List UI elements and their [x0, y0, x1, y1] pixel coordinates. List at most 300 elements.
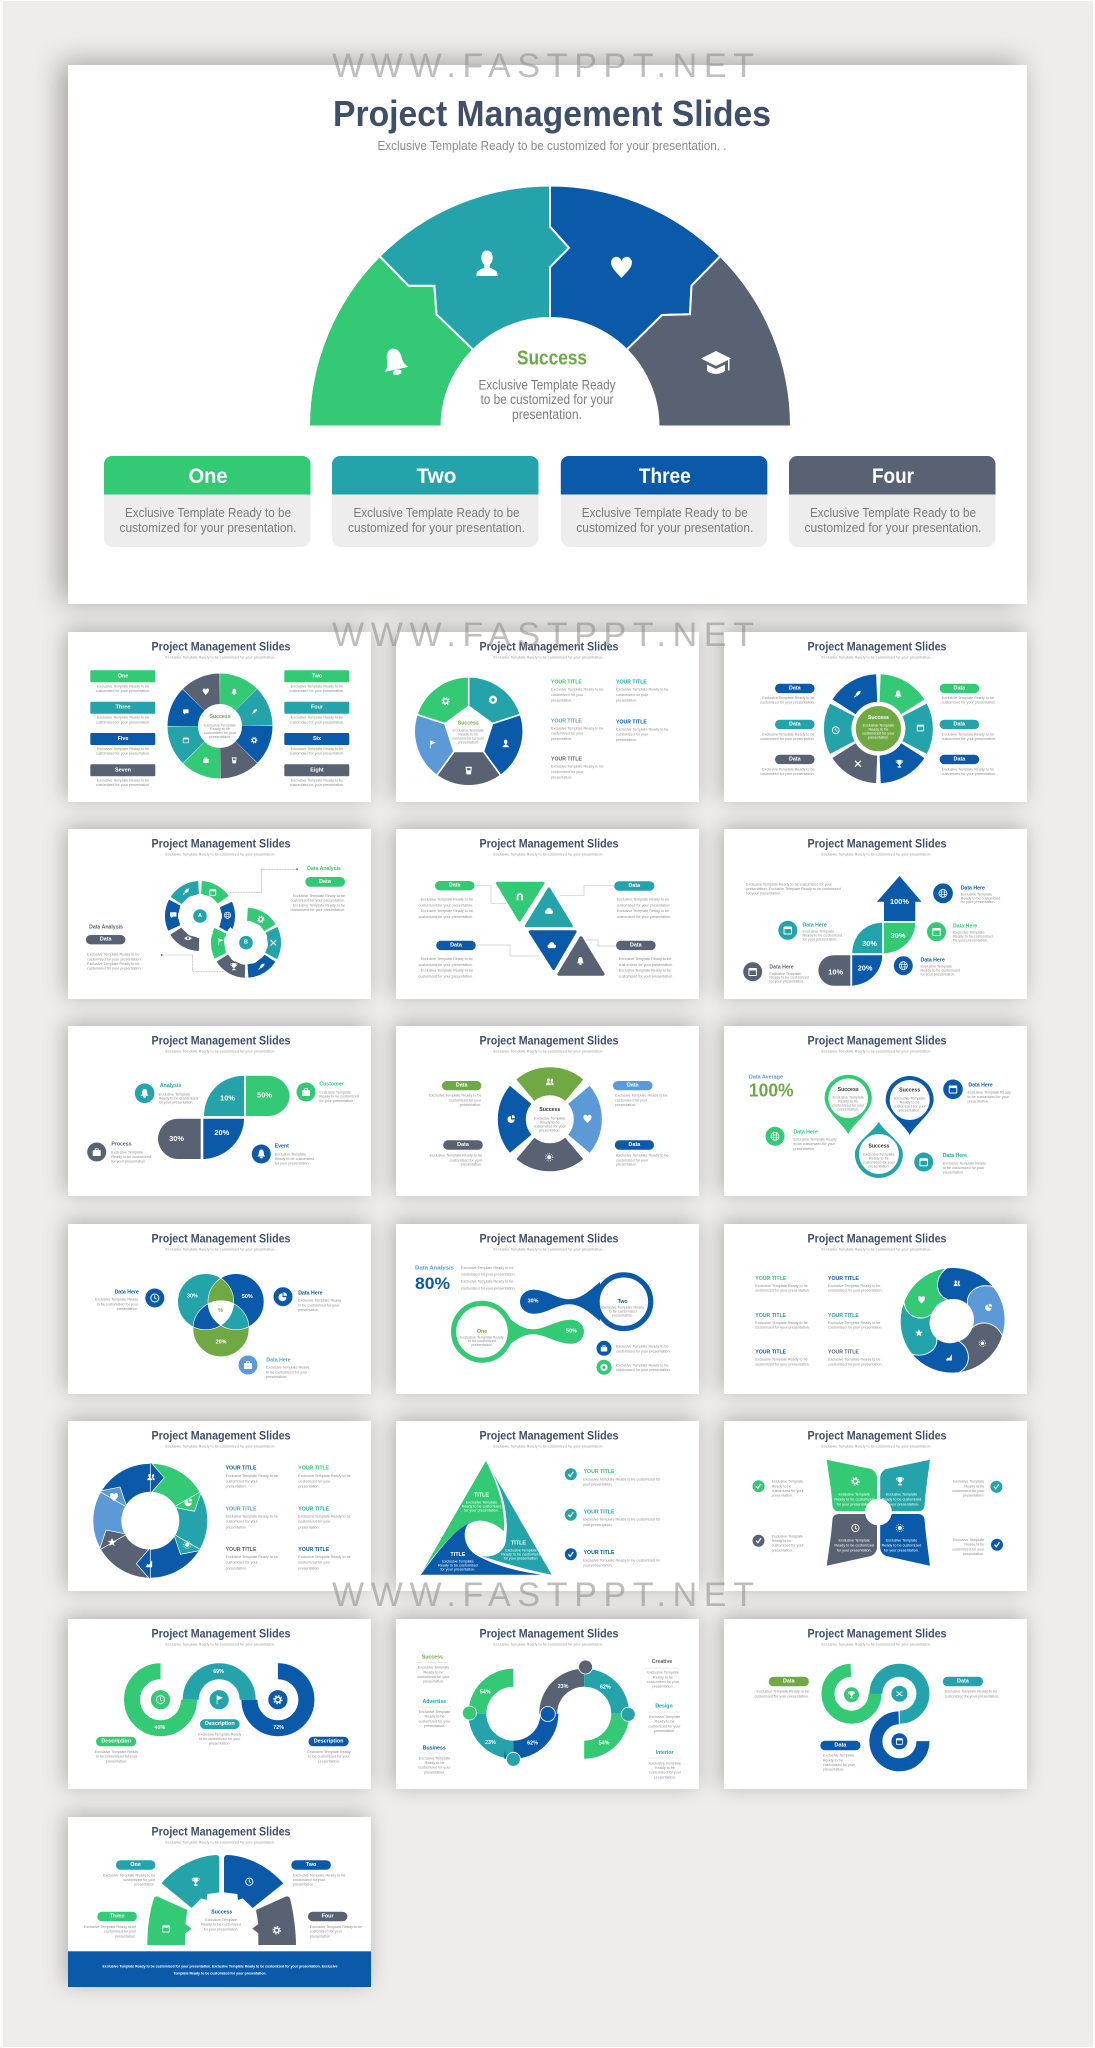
- label: left: Description: [101, 1738, 131, 1744]
- label: three: [84, 1912, 137, 1938]
- chart: wave: [477, 1678, 620, 1750]
- label: three: Exclusive Template Ready to be: [84, 1925, 136, 1929]
- label: teal: Data: [628, 883, 641, 889]
- text block: for your presentation.: [746, 892, 781, 896]
- subheading: Exclusive Template Ready to be customized for your presentation.: [166, 853, 276, 857]
- percent labels: 54%: [599, 1741, 610, 1747]
- label: dark: customized for your presentation.: [619, 975, 673, 979]
- gear ring B: [218, 914, 274, 971]
- gear hubs: A: [198, 913, 202, 919]
- callout: dark: Data Here: [769, 965, 794, 971]
- label boxes left: customized for your presentation.: [96, 720, 150, 724]
- callout: blue: presentation.: [968, 1100, 989, 1104]
- chart: donut: [183, 689, 257, 763]
- label: dark: Data: [457, 1142, 470, 1148]
- segment: dark: [252, 1896, 296, 1945]
- center circle: customized for your: [862, 732, 895, 736]
- labels right: [940, 684, 996, 776]
- label: teal: Exclusive Template Ready to be: [617, 897, 669, 901]
- check item: YOUR TITLE: [584, 1510, 615, 1516]
- icon: bell: [380, 346, 409, 377]
- text block: [828, 1350, 883, 1366]
- callout: dark: for your presentation.: [769, 980, 804, 984]
- callout: green: Ready to be customized: [953, 935, 993, 939]
- card: Four: Four: [872, 465, 914, 488]
- labels left: Data: [789, 685, 802, 691]
- text block: [828, 1276, 883, 1293]
- footer band: Exclusive Template Ready to be customized for your presentation. Exclusive Template Ready to be customized for your presentation. Exclusive: [102, 1965, 338, 1969]
- callout: green: presentation.: [794, 1147, 815, 1151]
- heading: Project Management Slides: [152, 1629, 290, 1641]
- wing: dark: Exclusive Template: [838, 1538, 870, 1542]
- arrowheads: [92, 1462, 208, 1580]
- text block: YOUR TITLE: [551, 757, 582, 763]
- chart: blue 20: [852, 955, 882, 986]
- panel: slide 17, wave with nodes: [396, 1619, 699, 1789]
- pin: blue: Success: [899, 1088, 920, 1094]
- center text: Exclusive Template: [453, 729, 484, 733]
- callout: green: Exclusive Template: [953, 931, 984, 935]
- callout: teal: [778, 921, 842, 942]
- callout: left: [95, 1288, 164, 1311]
- watermark text: WWW.FASTPPT.NET: [332, 1576, 754, 1614]
- heading: Project Management Slides: [808, 1234, 946, 1246]
- triangle labels: Ready to be customized: [462, 1505, 501, 1509]
- chart: arrow: [877, 876, 922, 921]
- chart: dark 10: [818, 955, 850, 986]
- label: teal: customized for your presentation.: [617, 915, 671, 919]
- label boxes left: Three: [116, 705, 130, 711]
- text block: presentation.: [551, 776, 572, 780]
- nodes: [462, 1660, 635, 1766]
- subheading: Exclusive Template Ready to be customized for your presentation.: [166, 656, 276, 660]
- check item: customized for your: [952, 1547, 985, 1551]
- label: blue: customized for your presentation.: [418, 975, 473, 979]
- text block: customized for your presentation.: [461, 1286, 516, 1290]
- callout left: Data: [100, 937, 113, 943]
- callout: analysis: Exclusive Template: [159, 1092, 190, 1096]
- label: dark: [616, 941, 673, 979]
- panel: slide 1, eight segment donut: [68, 632, 371, 802]
- callout: globe: Ready to be customized: [920, 969, 960, 973]
- segment: green: [309, 256, 473, 426]
- label boxes right: Six: [313, 736, 321, 742]
- label: olive: Exclusive Template Ready to be: [429, 1094, 481, 1098]
- text block: Exclusive Template Ready to be: [298, 1514, 351, 1518]
- icons on donut: [183, 689, 257, 763]
- labels left: customized for your presentation.: [760, 701, 815, 705]
- big number: Data Analysis: [415, 1265, 454, 1271]
- label: advertise: customized for your: [418, 1719, 451, 1723]
- segment: teal: [380, 186, 569, 350]
- callout: left: Data Here: [115, 1290, 139, 1296]
- label: teal: Data: [957, 1678, 970, 1684]
- check item: Ready to be: [964, 1543, 984, 1547]
- center circle: [856, 706, 901, 751]
- subheading: Exclusive Template Ready to be customized for your presentation.: [494, 1643, 604, 1647]
- callout: bottom: [238, 1356, 309, 1379]
- labels left: Data: [789, 756, 802, 762]
- text block: [298, 1547, 351, 1570]
- chart: teal 30: 30%: [862, 939, 877, 948]
- text block: customized for your: [616, 693, 649, 697]
- text block: [226, 1506, 278, 1529]
- heading: Project Management Slides: [480, 1234, 618, 1246]
- labels right: customized for your presentation.: [942, 737, 996, 741]
- check item: YOUR TITLE: [584, 1469, 615, 1475]
- label: success: Ready to be: [424, 1670, 443, 1674]
- label: light blue: Exclusive Template Ready to be: [615, 1094, 667, 1098]
- connector lines: [474, 886, 616, 956]
- label boxes left: Exclusive Template Ready to be: [97, 747, 149, 751]
- text block: presentation. Exclusive Template Ready to be customized: [746, 887, 841, 891]
- callout: green: [766, 1127, 837, 1151]
- label: right: Exclusive Template Ready: [307, 1750, 351, 1754]
- callout: event: [252, 1144, 314, 1165]
- label boxes left: Exclusive Template Ready to be: [97, 684, 149, 688]
- label: blue: Data: [835, 1742, 847, 1748]
- callout: right: presentation.: [298, 1308, 319, 1312]
- subheading: Exclusive Template Ready to be customized for your presentation.: [822, 1643, 932, 1647]
- label: business: [418, 1745, 451, 1774]
- text block: Exclusive Template Ready to be: [461, 1266, 513, 1270]
- check item: Exclusive Template: [953, 1538, 984, 1542]
- callout: right: Exclusive Template Ready: [298, 1299, 341, 1303]
- text block: Exclusive Template Ready to be: [551, 726, 603, 730]
- label boxes right: customized for your presentation.: [290, 752, 344, 756]
- subheading: Exclusive Template Ready to be customized for your presentation.: [166, 1445, 276, 1449]
- pin: teal: [855, 1122, 903, 1178]
- wing: dark: for your presentation.: [837, 1548, 872, 1552]
- pin: green: presentation.: [838, 1108, 859, 1112]
- labels right: Exclusive Template Ready to be: [942, 696, 994, 700]
- label: blue: [615, 1140, 668, 1167]
- label: light blue: customized for your: [615, 1098, 648, 1102]
- text block: [616, 679, 668, 702]
- label boxes right: customized for your presentation.: [290, 689, 344, 693]
- label: teal: Exclusive Template Ready to be: [617, 909, 669, 913]
- label: dark: [430, 1140, 483, 1167]
- percent labels: 23%: [558, 1684, 569, 1690]
- label boxes right: customized for your presentation.: [290, 783, 344, 787]
- label: four: [308, 1912, 362, 1938]
- label: success: [416, 1655, 450, 1684]
- callout: blue: customized for your presentation.: [616, 1349, 671, 1353]
- label: olive: customized for your presentation.: [754, 1694, 809, 1698]
- text block: YOUR TITLE: [828, 1350, 859, 1356]
- shape: green dumbbell: to be customized: [468, 1339, 496, 1343]
- check item: presentation.: [963, 1494, 984, 1498]
- text block: YOUR TITLE: [616, 679, 647, 685]
- pin: blue: Exclusive Template: [894, 1097, 925, 1101]
- labels right: customized for your presentation.: [942, 772, 996, 776]
- heading: Project Management Slides: [152, 839, 290, 851]
- wing: teal: [880, 1460, 930, 1511]
- text block: customized for your: [298, 1479, 331, 1483]
- label: teal: customized for your presentation.: [617, 903, 671, 907]
- text block: customized for your presentation.: [755, 1289, 810, 1293]
- text block: customized for your: [298, 1560, 331, 1564]
- label: business: Ready to be: [425, 1761, 444, 1765]
- chart: half ring of four puzzle segments: [309, 186, 791, 426]
- chart: venn: [178, 1274, 264, 1357]
- label: dark: presentation.: [461, 1163, 482, 1167]
- callout: blue: Data Here: [968, 1082, 993, 1088]
- label: teal: customized for your presentation.: [945, 1694, 999, 1698]
- percent labels: 72%: [273, 1725, 284, 1731]
- label: interior: customized for your: [649, 1771, 682, 1775]
- callout right: Data Analysis: [307, 866, 341, 872]
- text block: Exclusive Template Ready to be: [461, 1280, 513, 1284]
- text block: YOUR TITLE: [755, 1313, 787, 1319]
- pin: green: Ready to be: [838, 1100, 858, 1104]
- chart: arrow: 100%: [890, 897, 909, 906]
- label: right: Description: [314, 1738, 343, 1744]
- label: blue: [820, 1741, 860, 1772]
- label: design: Design: [655, 1704, 673, 1710]
- triangle labels: for your presentation.: [464, 1509, 499, 1513]
- label: advertise: Exclusive Template: [419, 1710, 450, 1714]
- callout: event: Exclusive Template: [275, 1153, 306, 1157]
- text block: YOUR TITLE: [828, 1276, 859, 1282]
- text block: presentation.: [226, 1485, 247, 1489]
- check item: Ready to be: [772, 1539, 791, 1543]
- check item: customized for your: [772, 1489, 805, 1493]
- text block: YOUR TITLE: [551, 718, 582, 724]
- label: one: Exclusive Template Ready to be: [103, 1873, 155, 1877]
- panel: slide 6, arrow steps: [724, 829, 1027, 999]
- label boxes right: Exclusive Template Ready to be: [291, 684, 343, 688]
- chart: swirl triangle: [421, 1461, 552, 1575]
- callout: green: [927, 922, 993, 943]
- label: left: presentation.: [106, 1759, 127, 1763]
- triangle labels: TITLE: [474, 1493, 489, 1499]
- label: center: Exclusive Template Ready: [198, 1732, 242, 1736]
- wing: teal: Exclusive Template: [886, 1492, 917, 1496]
- labels left: customized for your presentation.: [760, 772, 815, 776]
- triangle labels: TITLE: [450, 1552, 466, 1558]
- text block: customized for your: [551, 770, 584, 774]
- triangles: [498, 883, 603, 974]
- wing: dark: Ready to be customized: [834, 1543, 874, 1547]
- label: one: [103, 1860, 156, 1887]
- label: interior: Exclusive Template: [649, 1761, 681, 1765]
- labels right: customized for your presentation.: [942, 701, 996, 705]
- callout: green: customized for your presentation.: [616, 1368, 671, 1372]
- text block: Exclusive Template Ready to be: [551, 765, 603, 769]
- center text: [478, 378, 616, 422]
- label: olive: Data: [456, 1083, 469, 1089]
- text block: YOUR TITLE: [226, 1547, 257, 1553]
- callout left: customized for your presentation.: [87, 967, 142, 971]
- text block: Exclusive Template Ready to be: [616, 687, 668, 691]
- text block: YOUR TITLE: [828, 1313, 859, 1319]
- label: right: [307, 1737, 351, 1763]
- check item: Exclusive Template: [772, 1480, 803, 1484]
- text block: Exclusive Template Ready to be: [551, 687, 603, 691]
- heading: Project Management Slides: [152, 642, 290, 654]
- callout: globe: Data Here: [920, 958, 945, 964]
- percent labels: 45%: [155, 1725, 165, 1731]
- pin: teal: presentation.: [868, 1164, 890, 1168]
- check item: customized for your: [772, 1544, 805, 1548]
- text block: [551, 679, 603, 702]
- labels left: Exclusive Template Ready to be: [762, 696, 815, 700]
- icons on ring: [832, 690, 924, 768]
- callout: teal: Exclusive Template: [802, 930, 834, 934]
- label: dark: customized for your presentation.: [619, 963, 673, 967]
- label: two: [291, 1860, 345, 1887]
- label: two: Two: [306, 1862, 317, 1868]
- text block: customized for your presentation.: [755, 1362, 810, 1366]
- petal: green 50: 50%: [257, 1090, 272, 1100]
- text block: [461, 1266, 516, 1290]
- arc icons: [507, 1078, 592, 1161]
- text block: customized for your: [551, 732, 584, 736]
- center text: Exclusive Template: [534, 1116, 566, 1120]
- text block: [551, 718, 603, 741]
- pin: blue: customized for your: [894, 1105, 927, 1109]
- segment: blue: [224, 1855, 283, 1908]
- label: blue: customized for your: [823, 1763, 856, 1767]
- check item: Exclusive Template Ready to be customized for: [583, 1558, 661, 1562]
- center text: [534, 1107, 567, 1133]
- text block: YOUR TITLE: [226, 1506, 257, 1512]
- center text: customized for your: [204, 731, 237, 735]
- check item: Ready to be: [772, 1484, 791, 1488]
- donut icons: [915, 1280, 992, 1360]
- wing: green: Exclusive Template: [838, 1492, 870, 1496]
- callout: customer: Customer: [319, 1082, 344, 1088]
- shape: blue dumbbell: presentation.: [612, 1313, 633, 1317]
- labels left: [760, 684, 815, 776]
- check item: [752, 1534, 805, 1552]
- callout: right: [274, 1287, 341, 1312]
- callout: blue search: for your presentation.: [961, 900, 996, 904]
- center text: presentation.: [209, 735, 231, 739]
- label: left: to be customized for your: [96, 1755, 138, 1759]
- big number: Data Average: [749, 1075, 783, 1081]
- heading: Project Management Slides: [480, 642, 618, 654]
- shape: green dumbbell: One: [477, 1329, 487, 1335]
- panel: slide 2, pentagon ring: [396, 632, 699, 802]
- percent labels: [155, 1669, 284, 1731]
- label: right: to be customized for your: [308, 1755, 350, 1759]
- wing: green: Ready to be customized: [834, 1497, 874, 1501]
- subheading: Exclusive Template Ready to be customized for your presentation.: [822, 1050, 932, 1054]
- card: Four: Exclusive Template Ready to be: [810, 505, 976, 520]
- text block: [755, 1350, 810, 1366]
- text block: customized for your presentation.: [461, 1273, 516, 1277]
- label: left: [95, 1737, 138, 1763]
- chart: venn: %: [218, 1308, 223, 1314]
- panel: main slide: [68, 65, 1027, 604]
- callout: dark: [743, 962, 809, 984]
- check item: presentation.: [772, 1494, 793, 1498]
- label: design: presentation.: [654, 1729, 675, 1733]
- shape: green dumbbell: [454, 1303, 584, 1360]
- card: Three: customized for your presentation.: [576, 520, 753, 535]
- labels right: Data: [954, 756, 966, 762]
- card: One: [104, 456, 310, 547]
- triangle labels: Ready to be customized: [501, 1553, 541, 1557]
- callout: analysis: [135, 1083, 198, 1105]
- text block: YOUR TITLE: [551, 679, 582, 685]
- callout: right: Data Here: [298, 1291, 323, 1297]
- label: creative: [646, 1659, 680, 1689]
- label boxes right: Exclusive Template Ready to be: [291, 778, 343, 782]
- pin: green: Success: [838, 1087, 859, 1093]
- icons on gears: [170, 888, 276, 970]
- label: blue: Exclusive Template: [823, 1754, 854, 1758]
- icons on ring: [430, 696, 509, 774]
- text block: customized for your: [551, 693, 584, 697]
- segment: blue: [550, 186, 720, 350]
- callout: analysis: Analysis: [160, 1083, 181, 1089]
- text block: Exclusive Template Ready to be: [755, 1321, 808, 1325]
- heading: Project Management Slides: [808, 1629, 946, 1641]
- callout: left: presentation.: [117, 1307, 138, 1311]
- labels right: Data: [954, 721, 966, 727]
- callout: blue search: Data Here: [961, 885, 985, 891]
- panel: slide 4, two gears: [68, 829, 371, 999]
- callout: blue search: Ready to be customized: [961, 896, 1000, 900]
- title: Project Management Slides: [333, 93, 771, 134]
- chart: blue 20: 20%: [858, 964, 873, 972]
- panel: slide 7, four percent petals: [68, 1026, 371, 1196]
- petal: blue 20: [203, 1119, 244, 1159]
- callout: green: [596, 1360, 671, 1375]
- callout right: Exclusive Template Ready to be: [293, 903, 345, 907]
- callout: blue: Exclusive Template Ready to be: [616, 1345, 668, 1349]
- wing: dark: [827, 1514, 877, 1566]
- callout: globe: Exclusive Template: [920, 965, 952, 969]
- center text: for your presentation.: [204, 1927, 238, 1931]
- label boxes left: One: [118, 673, 128, 679]
- label boxes right: Two: [312, 673, 323, 679]
- callout: process: Process: [111, 1142, 132, 1148]
- callout: green: Data Here: [794, 1129, 818, 1135]
- text block: [226, 1466, 278, 1489]
- callout: globe: for your presentation.: [920, 973, 955, 977]
- callout: left: to be customized for your: [97, 1302, 139, 1306]
- callout: event: Ready to be customized: [275, 1157, 314, 1161]
- label: olive: [429, 1081, 482, 1107]
- chart: ring segments: [107, 1478, 193, 1564]
- label: success: Exclusive Template: [418, 1666, 449, 1670]
- ring icons: [108, 1474, 192, 1567]
- wing: blue: Exclusive Template: [886, 1538, 917, 1542]
- panel: slide 10, venn diagram: [68, 1224, 371, 1394]
- shape: blue dumbbell: [520, 1275, 651, 1328]
- subheading: Exclusive Template Ready to be customized for your presentation.: [494, 656, 604, 660]
- callout right: Exclusive Template Ready to be: [293, 894, 345, 898]
- text block: customized for your: [298, 1520, 331, 1524]
- label: green: customized for your presentation.: [418, 915, 473, 919]
- percent labels: 62%: [527, 1741, 538, 1747]
- callout: teal: [914, 1152, 986, 1175]
- callout: green: to be customized for your: [794, 1142, 836, 1146]
- callout: blue: [943, 1080, 1011, 1104]
- panel: slide 8, four arcs: [396, 1026, 699, 1196]
- text block: [551, 757, 603, 780]
- callout: customer: Exclusive Template: [319, 1091, 351, 1095]
- callout: teal: Ready to be customized: [802, 934, 842, 938]
- text block: presentation.: [226, 1566, 247, 1570]
- shape: green dumbbell: presentation.: [471, 1343, 493, 1347]
- label: business: Exclusive Template: [419, 1756, 450, 1760]
- connector lines: [162, 869, 297, 972]
